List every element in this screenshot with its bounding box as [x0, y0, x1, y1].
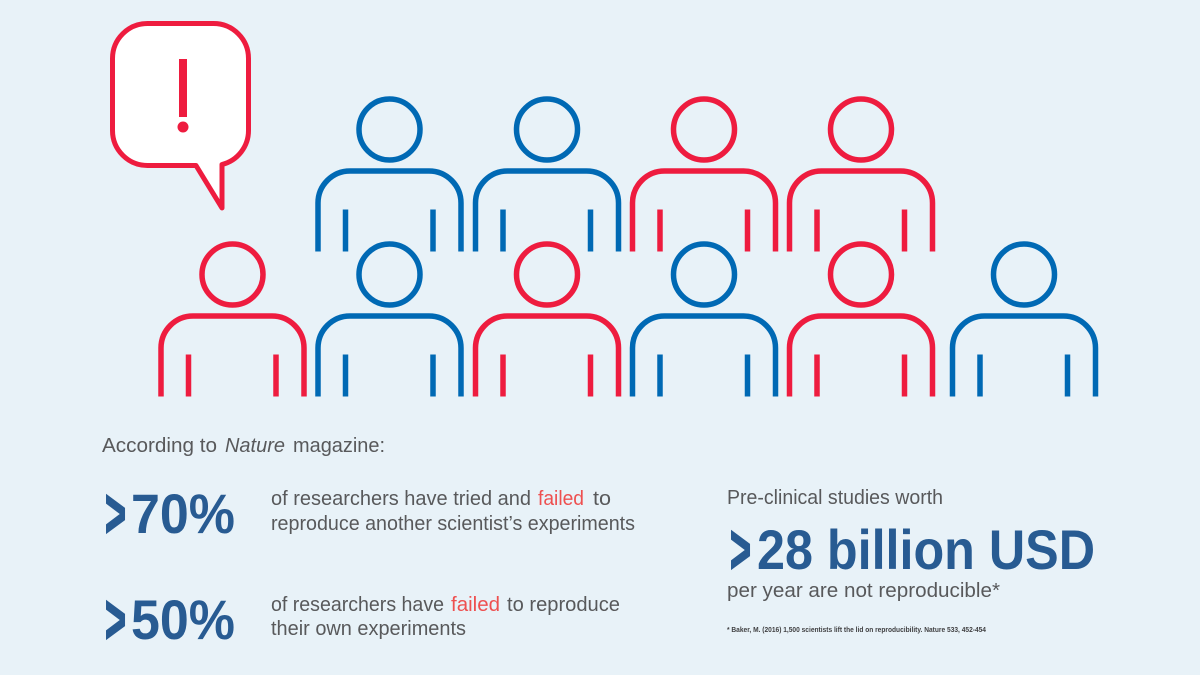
person: front row 5 — [790, 244, 932, 396]
text: 50 percent description: to reproduce — [507, 594, 620, 616]
person: back row 3 — [632, 99, 776, 252]
person: back row 1 — [318, 99, 461, 252]
person: front row 1 — [161, 244, 304, 396]
stat: over 50 percent: > — [105, 580, 126, 658]
person: back row 4 — [790, 99, 932, 252]
text: 70 percent description: reproduce another scientist’s experiments — [271, 513, 635, 535]
text: 50 percent description: failed — [451, 594, 500, 616]
stat: over 50 percent — [105, 580, 235, 658]
person: front row 6 — [952, 244, 1096, 396]
stat: over 70 percent: > — [105, 474, 126, 552]
stat: over 70 percent: 70% — [131, 482, 235, 545]
text: 70 percent description: failed — [538, 488, 584, 510]
stat: over 50 percent: 50% — [131, 588, 235, 651]
stat: over 28 billion USD — [730, 510, 1095, 588]
text: 70 percent description: to — [593, 488, 611, 510]
person: front row 4 — [632, 244, 776, 396]
person: back row 2 — [476, 99, 618, 252]
stat: over 28 billion USD: 28 billion USD — [757, 518, 1095, 581]
text: 70 percent description: of researchers have tried and — [271, 488, 531, 510]
person: front row 2 — [318, 244, 461, 396]
text: source intro — [102, 435, 385, 457]
crowd of researchers — [161, 99, 1096, 396]
text: source intro: According to — [102, 435, 217, 457]
text: not reproducible: per year are not reproducible* — [727, 580, 1000, 602]
text: 70 percent description — [271, 488, 635, 535]
text: 50 percent description: of researchers have — [271, 594, 444, 616]
stat: over 28 billion USD: > — [730, 510, 751, 588]
footnote: citation: * Baker, M. (2016) 1,500 scientists lift the lid on reproducibility. Nature 533, 452-454 — [727, 625, 987, 634]
icon: speech bubble with exclamation mark — [112, 24, 249, 208]
person: front row 3 — [476, 244, 618, 396]
text: pre-clinical lead-in: Pre-clinical studies worth — [727, 487, 943, 509]
text: source intro: Nature — [225, 435, 285, 457]
text: source intro: magazine: — [293, 435, 385, 457]
text: 50 percent description — [271, 594, 620, 640]
text: 50 percent description: their own experiments — [271, 618, 466, 640]
stat: over 70 percent — [105, 474, 235, 552]
